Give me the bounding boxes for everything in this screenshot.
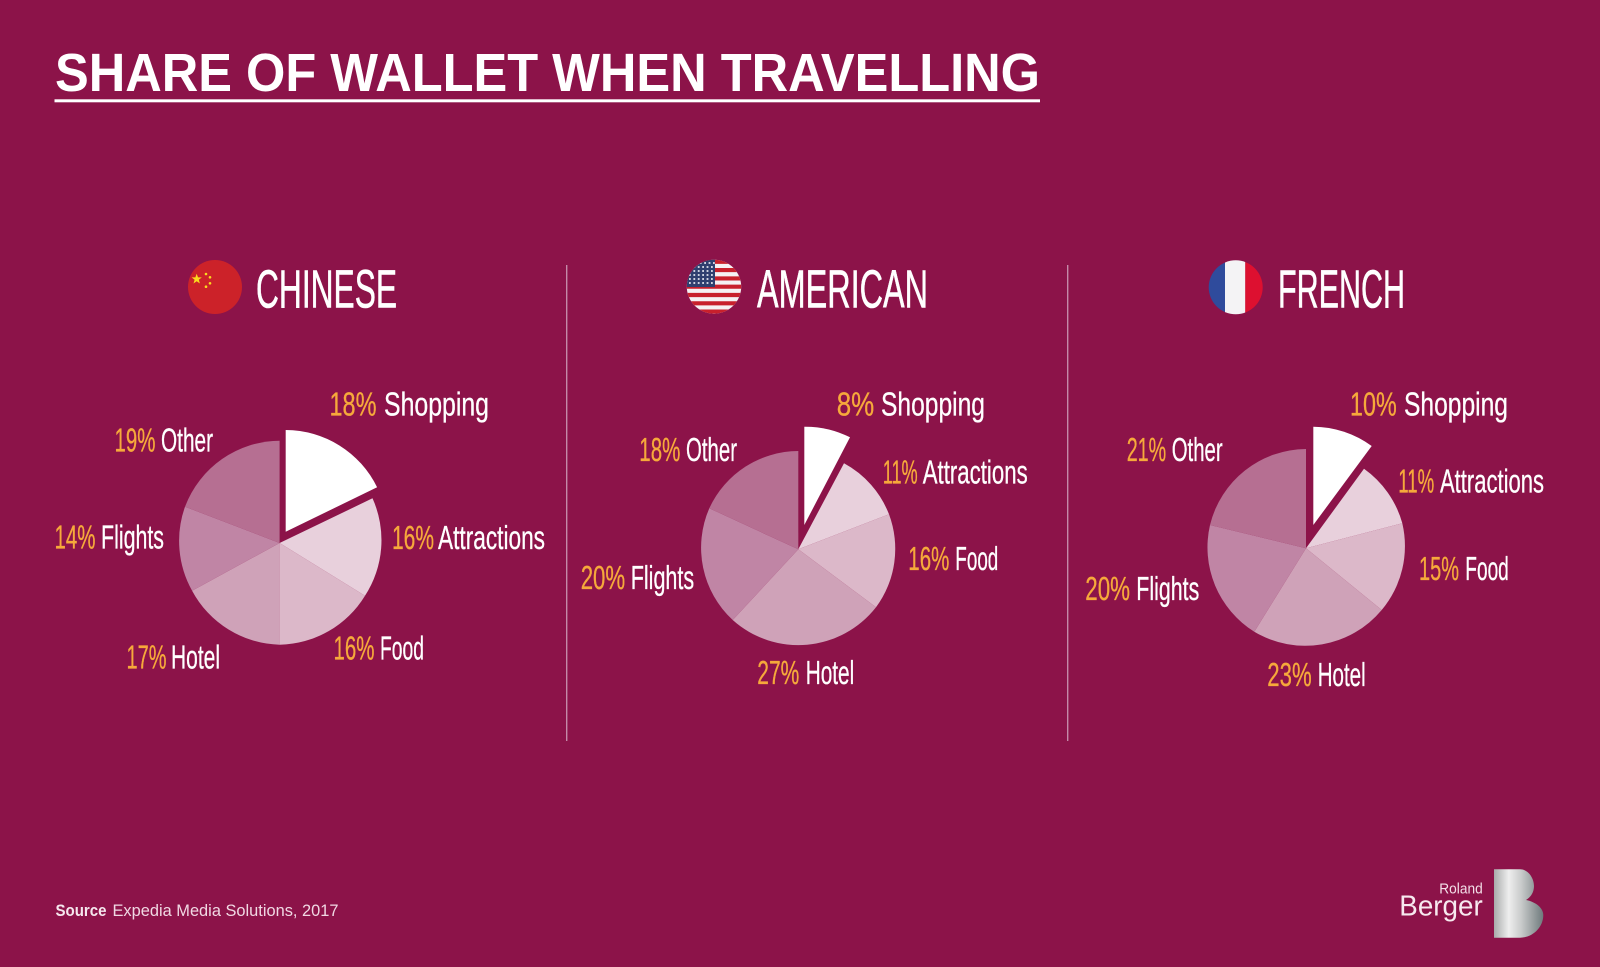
logo: Roland Berger: Berger xyxy=(1399,891,1483,923)
label: 16% Food: Food xyxy=(380,629,424,666)
label: 18% Shopping xyxy=(330,385,489,422)
label: 11% Attractions xyxy=(1398,463,1544,500)
label: 14% Flights: 14% xyxy=(54,518,96,555)
label: 16% Attractions xyxy=(392,519,545,556)
heading: Chinese: CHINESE xyxy=(256,259,397,319)
label: 14% Flights: Flights xyxy=(101,518,164,555)
label: 11% Attractions: 11% xyxy=(1398,463,1434,500)
label: 19% Other: Other xyxy=(161,422,213,459)
label: 8% Shopping: 8% xyxy=(837,385,874,422)
icon: China flag xyxy=(188,260,242,314)
source note: Expedia Media Solutions, 2017 xyxy=(112,902,338,920)
label: 27% Hotel: Hotel xyxy=(806,654,854,691)
label: 18% Shopping: Shopping xyxy=(384,385,489,422)
label: 23% Hotel: 23% xyxy=(1267,656,1312,693)
label: 23% Hotel xyxy=(1267,656,1366,693)
label: 11% Attractions: Attractions xyxy=(1440,463,1544,500)
label: 27% Hotel xyxy=(757,654,854,691)
label: 15% Food: 15% xyxy=(1419,550,1459,587)
label: 20% Flights: 20% xyxy=(581,559,625,596)
pie chart: American xyxy=(701,427,895,645)
label: 17% Hotel: 17% xyxy=(126,638,166,675)
label: 16% Food: Food xyxy=(955,540,998,577)
label: 20% Flights: Flights xyxy=(631,559,694,596)
label: 23% Hotel: Hotel xyxy=(1318,656,1366,693)
label: 21% Other: 21% xyxy=(1127,431,1166,468)
source note: Source xyxy=(56,902,106,920)
icon: France flag xyxy=(1208,260,1263,314)
heading: American: AMERICAN xyxy=(757,259,928,319)
label: 8% Shopping xyxy=(837,385,985,422)
label: 10% Shopping: Shopping xyxy=(1404,385,1508,422)
label: 20% Flights: 20% xyxy=(1085,570,1130,607)
title: SHARE OF WALLET WHEN TRAVELLING xyxy=(55,43,1040,103)
label: 15% Food: Food xyxy=(1465,550,1509,587)
label: 18% Other xyxy=(639,431,737,468)
label: 10% Shopping: 10% xyxy=(1350,385,1397,422)
label: 8% Shopping: Shopping xyxy=(881,385,985,422)
label: 20% Flights xyxy=(1085,570,1199,607)
label: 16% Attractions: Attractions xyxy=(438,519,545,556)
panel: American xyxy=(581,259,1028,691)
label: 18% Shopping: 18% xyxy=(330,385,376,422)
icon: USA flag xyxy=(686,259,742,315)
label: 19% Other xyxy=(114,422,213,459)
label: 11% Attractions: 11% xyxy=(883,453,918,490)
label: 11% Attractions xyxy=(883,453,1028,490)
logo: Roland Berger xyxy=(1399,869,1543,938)
pie chart: French xyxy=(1207,427,1405,646)
label: 16% Food: 16% xyxy=(334,629,374,666)
label: 18% Other: Other xyxy=(686,431,737,468)
label: 20% Flights: Flights xyxy=(1136,570,1199,607)
logo: Roland Berger: Roland xyxy=(1439,881,1483,897)
label: 21% Other xyxy=(1127,431,1223,468)
label: 21% Other: Other xyxy=(1172,431,1223,468)
label: 17% Hotel: Hotel xyxy=(171,638,220,675)
panel: French xyxy=(1085,258,1544,693)
pie chart: Chinese xyxy=(179,430,381,645)
label: 10% Shopping xyxy=(1350,385,1508,422)
label: 16% Attractions: 16% xyxy=(392,519,434,556)
label: 14% Flights xyxy=(54,518,164,555)
label: 19% Other: 19% xyxy=(114,422,156,459)
label: 16% Food: 16% xyxy=(908,540,949,577)
panel: Chinese xyxy=(54,259,545,675)
label: 18% Other: 18% xyxy=(639,431,680,468)
label: 20% Flights xyxy=(581,559,694,596)
heading: French: FRENCH xyxy=(1278,259,1405,319)
label: 11% Attractions: Attractions xyxy=(923,453,1028,490)
label: 27% Hotel: 27% xyxy=(757,654,799,691)
